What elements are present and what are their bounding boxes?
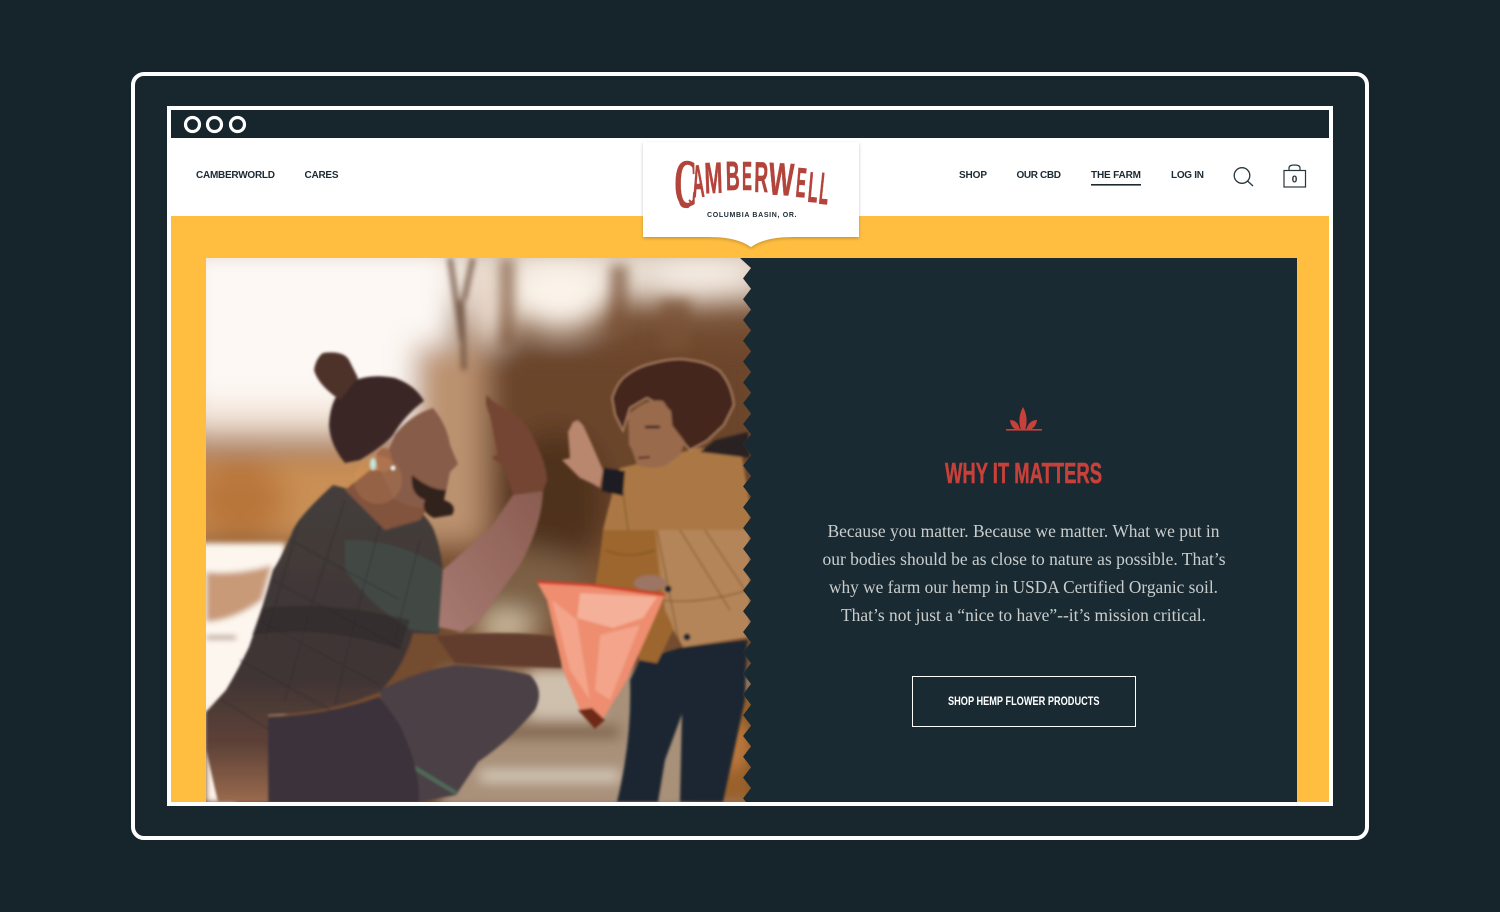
cuff: [602, 468, 625, 496]
right navigation: THE FARM: [1091, 170, 1141, 181]
man trousers far leg: [206, 352, 750, 802]
dark content panel: [740, 258, 1297, 802]
blurred tree streaks: [500, 258, 690, 350]
river bed: [440, 668, 752, 810]
icon: shopping bag: 0: [1292, 174, 1298, 186]
man hair bun: [314, 352, 358, 400]
yellow band: [171, 216, 1329, 802]
man lower arm: [436, 633, 562, 668]
icon: red leaf emblem: [1006, 407, 1042, 431]
shirt plaid: [238, 580, 366, 728]
right navigation: OUR CBD: [1016, 170, 1061, 181]
man raised hand: [486, 395, 547, 495]
shirt dark band: [252, 606, 410, 650]
body text: [822, 521, 1226, 625]
right navigation: LOG IN: [1171, 170, 1204, 181]
logo wordmark: C: [674, 147, 697, 221]
left navigation: [196, 170, 339, 181]
button: shop hemp flower products: SHOP HEMP FLOWER PRODUCTS: [948, 696, 1100, 708]
logo tab: [643, 142, 859, 247]
photo: father and child high five: [206, 258, 751, 802]
browser window: [167, 106, 1333, 806]
logo tab: L: [817, 163, 832, 214]
body text: Because you matter. Because we matter. What we put in: [828, 521, 1220, 541]
photo base tones: [206, 258, 752, 802]
left navigation: CAMBERWORLD: [196, 170, 275, 181]
boy face: [628, 401, 685, 468]
heading: WHY IT MATTERS: [945, 458, 1102, 490]
man raised forearm: [439, 491, 543, 632]
logo wordmark: B: [725, 153, 740, 199]
body text: That’s not just a “nice to have”--it’s mission critical.: [841, 605, 1206, 625]
page: website mockup on dark background: [131, 72, 1369, 840]
jeans: [617, 640, 747, 802]
man ear and flare: [376, 448, 392, 472]
right navigation: SHOP: [959, 170, 987, 181]
butterfly net: [537, 582, 665, 729]
icon: search: [1234, 168, 1253, 186]
window control dots: [186, 118, 244, 132]
bare tree trunk: [450, 258, 473, 370]
browser title bar: [171, 110, 1329, 138]
shirt sleeve green tone: [345, 540, 442, 633]
logo wordmark: E: [742, 153, 752, 199]
logo wordmark: M: [704, 154, 723, 203]
logo tagline: COLUMBIA BASIN, OR.: [707, 212, 797, 219]
icon: shopping bag: [1284, 165, 1306, 187]
body text: why we farm our hemp in USDA Certified Organic soil.: [829, 577, 1218, 597]
man trousers near leg: [262, 697, 419, 802]
man beard: [412, 475, 454, 518]
logo wordmark: W: [767, 152, 796, 206]
boy hand on net: [634, 575, 666, 591]
logo wordmark: L: [806, 164, 820, 212]
outer device frame: [133, 74, 1367, 838]
bright water and far bank: [200, 543, 285, 802]
boy hair: [612, 359, 734, 450]
man neck: [345, 470, 430, 530]
jacket collar: [700, 432, 750, 458]
man face: [388, 407, 459, 508]
man hair: [329, 376, 424, 463]
logo wordmark: R: [754, 154, 769, 202]
logo wordmark: E: [794, 159, 808, 206]
right navigation: [959, 170, 1204, 186]
jacket: [602, 446, 751, 638]
left navigation: CARES: [304, 170, 339, 181]
logo wordmark: A: [691, 155, 706, 207]
boy hand: [562, 420, 603, 488]
man shirt: [206, 485, 443, 802]
button: shop hemp flower products: [912, 676, 1136, 726]
logo wordmark: [674, 147, 832, 221]
body text: our bodies should be as close to nature as possible. That’s: [822, 549, 1226, 569]
